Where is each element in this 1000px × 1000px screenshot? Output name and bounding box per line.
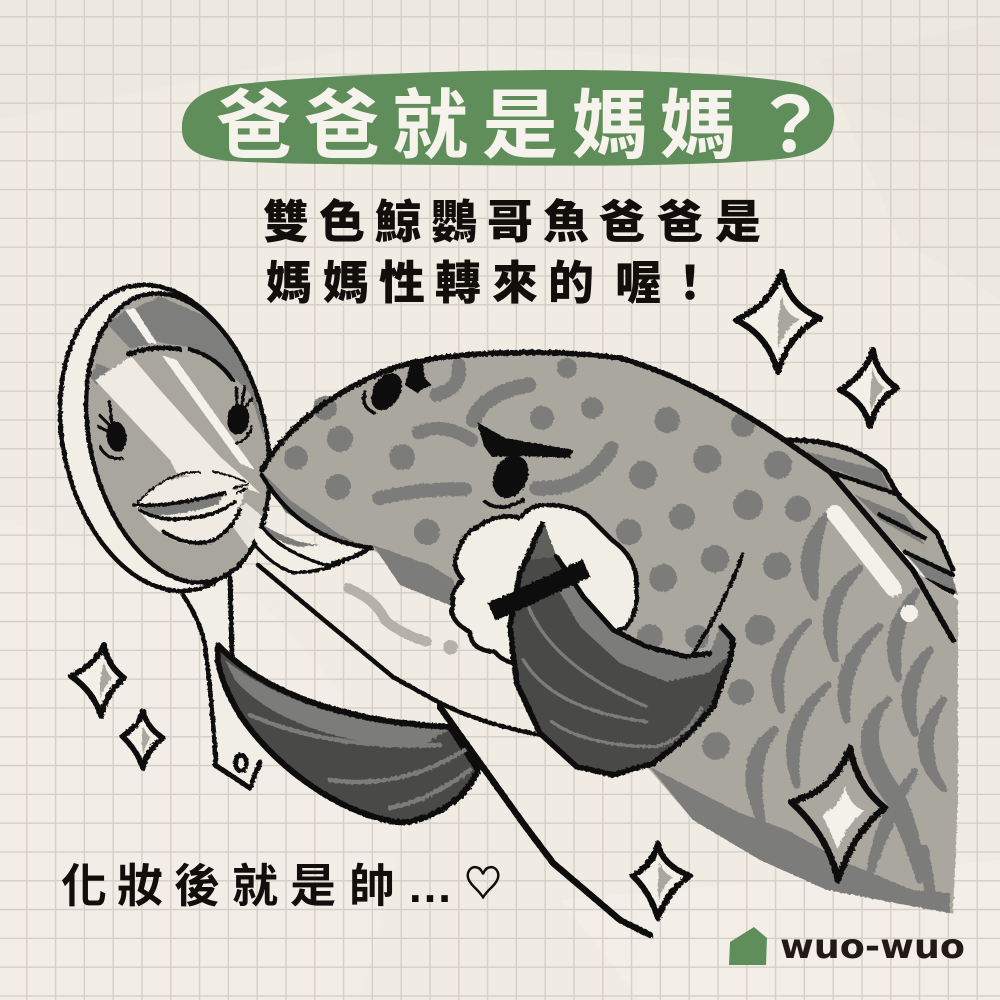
- mirror lower light patch: [230, 502, 262, 548]
- mirror glass: [88, 295, 268, 581]
- icon: green house: [729, 927, 767, 965]
- fish lower eye: [485, 449, 535, 507]
- title text: 爸爸就是媽媽？: [216, 84, 828, 169]
- title banner: [182, 70, 834, 169]
- mirror wide light band: [95, 357, 260, 493]
- handle ring: [236, 755, 246, 771]
- bikini strap: [440, 707, 650, 935]
- caption: [61, 860, 502, 912]
- handle plate: [215, 762, 260, 788]
- fish scales: [537, 448, 943, 890]
- subtitle line 1: 雙色鯨鸚哥魚爸爸是: [263, 196, 761, 248]
- fish spots: [284, 358, 811, 760]
- fish nostril: [405, 363, 432, 393]
- logo text: wuo-wuo: [780, 927, 965, 967]
- sparkle top large: [736, 272, 820, 372]
- subtitle: [263, 196, 761, 309]
- fish body: [253, 353, 958, 913]
- mirror rim: [59, 275, 297, 601]
- black band: [492, 568, 587, 612]
- mirror gray stripe: [183, 416, 194, 427]
- caption heart: ♡: [464, 864, 502, 906]
- washcloth puff: [452, 505, 637, 665]
- banner shape: [182, 70, 834, 166]
- reflection face: [98, 348, 252, 545]
- sparkle left upper: [71, 645, 124, 716]
- illustration: [33, 266, 958, 935]
- reflection lips: [135, 476, 247, 545]
- brows: [128, 348, 180, 354]
- fish eyebrow: [477, 422, 573, 458]
- mirror handle: [183, 575, 262, 788]
- right bikini cup: [492, 522, 733, 775]
- mirror frame: [33, 266, 293, 610]
- left eye: [105, 420, 129, 453]
- cup light band: [557, 577, 733, 682]
- mirror dark top: [133, 297, 265, 440]
- mirror: [56, 282, 272, 594]
- sparkle bottom: [633, 844, 690, 918]
- mirror thin highlight: [125, 308, 157, 343]
- fish belly shadow: [262, 472, 950, 913]
- logo: [729, 927, 965, 967]
- fish lower jaw lines: [253, 475, 372, 573]
- subtitle line 2: 媽媽性轉來的喔！: [266, 257, 713, 309]
- fish face squiggles: [379, 365, 528, 498]
- sparkle on body: [791, 748, 885, 880]
- sparkle left lower: [122, 711, 163, 768]
- fish back outline: [262, 353, 953, 640]
- fish highlights: [835, 513, 893, 588]
- fish dorsal fin: [780, 437, 958, 597]
- sparkle top small: [840, 350, 897, 426]
- fish belly marks: [348, 588, 458, 655]
- fish upper eye: [364, 363, 432, 416]
- caption text: 化妝後就是帥…: [61, 860, 453, 912]
- right eye: [225, 403, 251, 436]
- lower bikini cup: [217, 645, 478, 822]
- bikini string: [258, 565, 560, 738]
- pectoral fin line: [693, 554, 743, 653]
